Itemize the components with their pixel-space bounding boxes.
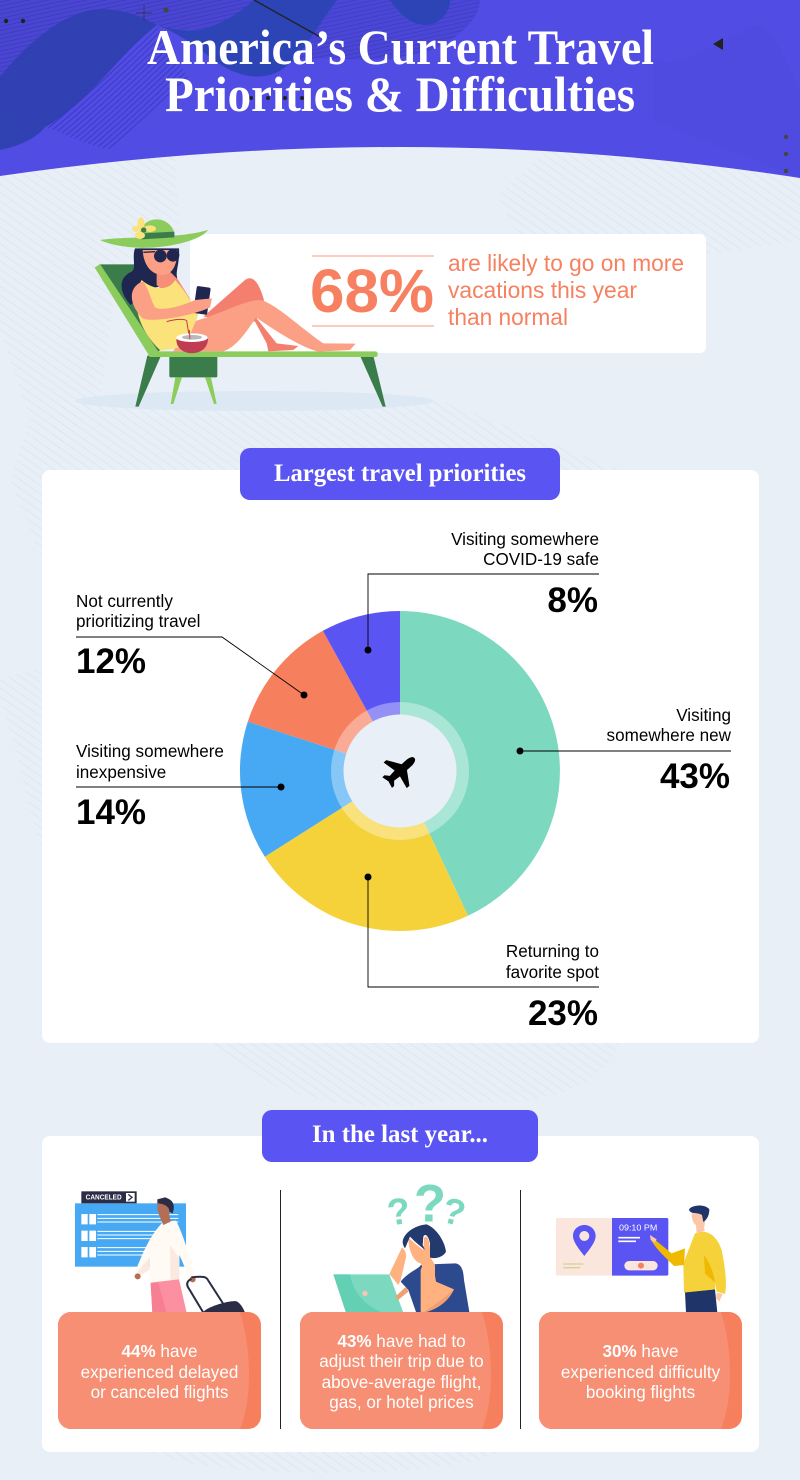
- label: Visiting somewhere new 43%: Visiting: [676, 706, 731, 725]
- title: Priorities & Difficulties: [165, 66, 635, 122]
- title: America’s Current Travel: [147, 19, 654, 75]
- illustration: man pointing at booking screen: [556, 1205, 726, 1313]
- label: Returning to favorite spot 23%: [364, 874, 599, 1033]
- label: Visiting somewhere inexpensive 14%: 14%: [76, 793, 146, 832]
- card: 44% delayed or canceled flights: 44% have: [121, 1342, 198, 1361]
- pie chart: [240, 611, 560, 931]
- label: Not currently prioritizing travel 12%: Not currently: [76, 592, 173, 611]
- illustration: traveler at canceled flights board: [75, 1191, 245, 1313]
- card: 43% adjusted trip due to prices: gas, or hotel prices: [329, 1393, 474, 1412]
- heading pill: in the last year: In the last year...: [312, 1121, 488, 1148]
- illustration: woman on sun lounger: [75, 217, 434, 411]
- label: Visiting somewhere COVID-19 safe 8%: COVID-19 safe: [483, 550, 599, 569]
- callout text: vacations this year: [448, 277, 637, 303]
- label: Visiting somewhere inexpensive 14%: inexpensive: [76, 763, 166, 782]
- callout panel: 68% vacations: [190, 234, 706, 353]
- label: Visiting somewhere new 43%: somewhere new: [607, 726, 732, 745]
- card: 43% adjusted trip due to prices: above-average flight,: [322, 1373, 481, 1392]
- card: 43% adjusted trip due to prices: [300, 1312, 503, 1429]
- statistic: 68%: 68%: [310, 257, 434, 325]
- label: Not currently prioritizing travel 12%: [76, 592, 308, 698]
- illustration: worried woman at laptop: ?: [414, 1175, 446, 1234]
- card: 44% delayed or canceled flights: experienced delayed: [81, 1363, 238, 1382]
- label: Not currently prioritizing travel 12%: 12%: [76, 642, 146, 681]
- card: 43% adjusted trip due to prices: adjust their trip due to: [319, 1352, 484, 1371]
- label: Returning to favorite spot 23%: favorite spot: [506, 963, 599, 982]
- card: 43% adjusted trip due to prices: 43% have had to: [337, 1332, 466, 1351]
- heading pill: in the last year: [262, 1110, 538, 1162]
- callout text: are likely to go on more: [448, 250, 684, 276]
- card: 30% difficulty booking flights: booking flights: [586, 1383, 695, 1402]
- card: 30% difficulty booking flights: 30% have: [602, 1342, 679, 1361]
- callout text: [448, 250, 684, 330]
- label: Visiting somewhere COVID-19 safe 8%: Visiting somewhere: [451, 530, 599, 549]
- title: [147, 19, 654, 122]
- callout text: than normal: [448, 304, 568, 330]
- label: Returning to favorite spot 23%: 23%: [528, 994, 598, 1033]
- label: Returning to favorite spot 23%: Returning to: [506, 942, 599, 961]
- label: Visiting somewhere inexpensive 14%: Visiting somewhere: [76, 742, 224, 761]
- card: 44% delayed or canceled flights: or canceled flights: [91, 1383, 228, 1402]
- header banner: [0, 0, 800, 178]
- label: Visiting somewhere new 43%: 43%: [660, 757, 730, 796]
- label: Visiting somewhere COVID-19 safe 8%: 8%: [547, 581, 598, 620]
- card: 44% delayed or canceled flights: [58, 1312, 261, 1429]
- panel: in the last year: [42, 1110, 759, 1452]
- label: Visiting somewhere inexpensive 14%: [76, 742, 284, 832]
- card: 30% difficulty booking flights: [539, 1312, 742, 1429]
- illustration: worried woman at laptop: ?: [438, 1189, 470, 1234]
- illustration: worried woman at laptop: [333, 1175, 470, 1313]
- panel: largest travel priorities: [42, 448, 759, 1043]
- card: 30% difficulty booking flights: experienced difficulty: [561, 1363, 721, 1382]
- heading pill: largest travel priorities: Largest travel priorities: [274, 460, 526, 487]
- illustration: man pointing at booking screen: 09:10 PM: [619, 1223, 657, 1233]
- label: Visiting somewhere new 43%: [516, 706, 732, 796]
- illustration: traveler at canceled flights board: CANCELED: [86, 1195, 122, 1202]
- icon: airplane: [376, 745, 426, 795]
- label: Visiting somewhere COVID-19 safe 8%: [364, 530, 599, 654]
- illustration: worried woman at laptop: ?: [384, 1189, 413, 1234]
- heading pill: largest travel priorities: [240, 448, 560, 500]
- label: Not currently prioritizing travel 12%: prioritizing travel: [76, 612, 200, 631]
